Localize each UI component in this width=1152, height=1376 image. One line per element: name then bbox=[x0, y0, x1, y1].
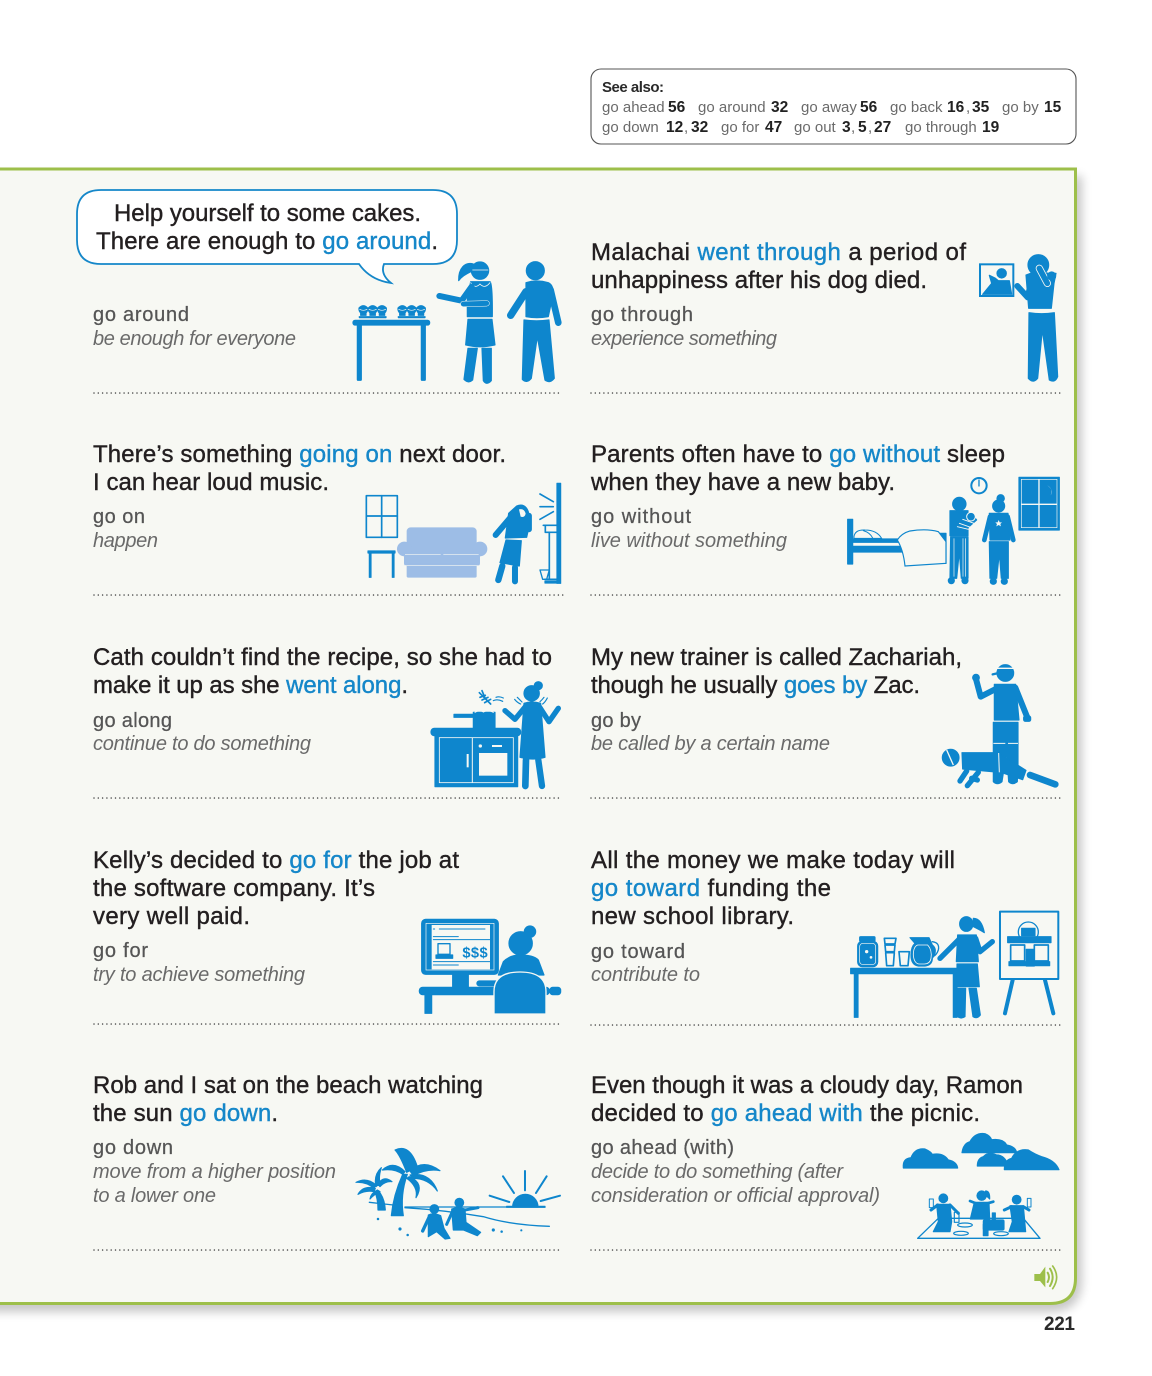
see also box: , bbox=[684, 119, 688, 136]
icon: audio speaker bbox=[1034, 1266, 1057, 1289]
example sentence: the sun go down. bbox=[93, 1100, 278, 1127]
definition bbox=[93, 940, 305, 986]
divider bbox=[591, 392, 1060, 394]
entry: go down bbox=[93, 1072, 560, 1239]
see also box: 32 bbox=[691, 119, 708, 136]
entry: go on bbox=[93, 441, 561, 583]
see also box: 15 bbox=[1044, 99, 1062, 116]
definition: be called by a certain name bbox=[591, 733, 830, 755]
icon: sofa, window and woman listening at wall bbox=[366, 483, 561, 583]
see also box: 12 bbox=[666, 119, 683, 136]
example sentence: very well paid. bbox=[93, 903, 250, 930]
definition: happen bbox=[93, 530, 158, 552]
example sentence: Malachai went through a period of bbox=[591, 239, 966, 266]
see also box: go down bbox=[602, 119, 659, 136]
definition bbox=[93, 304, 296, 350]
see also box: go around bbox=[698, 99, 766, 116]
definition: go without bbox=[591, 506, 691, 528]
definition: go toward bbox=[591, 941, 685, 963]
definition: go on bbox=[93, 506, 145, 528]
definition: go ahead (with) bbox=[591, 1137, 734, 1159]
divider bbox=[591, 797, 1060, 799]
example sentence bbox=[93, 644, 552, 699]
icon: man crying at a framed photo bbox=[980, 255, 1058, 381]
example sentence bbox=[93, 441, 506, 496]
example sentence: My new trainer is called Zachariah, bbox=[591, 644, 962, 671]
see also box: go back bbox=[890, 99, 943, 116]
see also box: go through bbox=[905, 119, 977, 136]
entry: go toward bbox=[591, 847, 1058, 1018]
icon: couple on a beach watching the sunset bbox=[356, 1149, 560, 1239]
example sentence bbox=[591, 644, 962, 699]
main panel bbox=[0, 169, 1076, 1304]
definition: to a lower one bbox=[93, 1185, 216, 1207]
definition: live without something bbox=[591, 530, 787, 552]
icon: woman at a computer with a high-salary job ad bbox=[419, 919, 561, 1014]
divider bbox=[591, 1249, 1060, 1251]
entry: go along bbox=[93, 644, 558, 787]
example sentence: when they have a new baby. bbox=[590, 469, 895, 496]
definition bbox=[591, 710, 830, 755]
definition: consideration or official approval) bbox=[591, 1185, 880, 1207]
see also box bbox=[591, 69, 1076, 144]
see also box: 56 bbox=[860, 99, 878, 116]
example sentence: I can hear loud music. bbox=[93, 469, 329, 496]
see also box: 19 bbox=[982, 119, 1000, 136]
example sentence: There are enough to go around. bbox=[96, 228, 438, 255]
definition: experience something bbox=[591, 328, 777, 350]
see also box: go away bbox=[801, 99, 857, 116]
speech bubble bbox=[77, 190, 457, 283]
definition bbox=[591, 1137, 880, 1207]
definition bbox=[591, 304, 777, 350]
see also box: 5 bbox=[858, 119, 867, 136]
see also box: , bbox=[966, 99, 970, 116]
divider bbox=[94, 797, 562, 799]
see also box: 47 bbox=[765, 119, 782, 136]
example sentence: Help yourself to some cakes. bbox=[114, 200, 421, 227]
definition bbox=[591, 941, 700, 986]
example sentence bbox=[591, 1072, 1023, 1127]
example sentence bbox=[590, 441, 1005, 496]
definition: move from a higher position bbox=[93, 1161, 336, 1183]
divider bbox=[94, 594, 566, 596]
page number: 221 bbox=[1044, 1314, 1075, 1335]
icon: bed, parents with baby, clock and night window bbox=[848, 477, 1059, 584]
example sentence bbox=[93, 1072, 483, 1127]
definition: be enough for everyone bbox=[93, 328, 296, 350]
icon: fundraising table, woman and library poster bbox=[851, 912, 1058, 1018]
see also box: See also: bbox=[602, 79, 664, 96]
see also box: 35 bbox=[972, 99, 990, 116]
definition bbox=[93, 1137, 336, 1207]
panel shadow bbox=[0, 176, 1082, 1312]
icon: picnic under cloudy sky bbox=[903, 1133, 1059, 1238]
icon: woman improvising a recipe at the kitchen counter bbox=[431, 682, 558, 787]
example sentence: Rob and I sat on the beach watching bbox=[93, 1072, 483, 1099]
divider bbox=[94, 392, 562, 394]
entry: go by bbox=[591, 644, 1055, 786]
example sentence: new school library. bbox=[591, 903, 794, 930]
example sentence bbox=[591, 847, 955, 930]
example sentence: Even though it was a cloudy day, Ramon bbox=[591, 1072, 1023, 1099]
example sentence bbox=[96, 200, 438, 255]
example sentence: Kelly’s decided to go for the job at bbox=[93, 847, 459, 874]
example sentence: go toward funding the bbox=[591, 875, 831, 902]
see also box: , bbox=[868, 119, 872, 136]
definition bbox=[591, 506, 787, 552]
definition bbox=[93, 710, 311, 755]
definition: go by bbox=[591, 710, 641, 732]
see also box: go for bbox=[721, 119, 759, 136]
see also box: go by bbox=[1002, 99, 1039, 116]
see also box: go ahead bbox=[602, 99, 665, 116]
example sentence bbox=[591, 239, 966, 294]
see also box: , bbox=[851, 119, 855, 136]
definition: go around bbox=[93, 304, 189, 326]
see also box: 3 bbox=[842, 119, 851, 136]
example sentence: decided to go ahead with the picnic. bbox=[591, 1100, 980, 1127]
entry: go around bbox=[77, 190, 558, 383]
entry: go through bbox=[591, 239, 1058, 381]
definition: go along bbox=[93, 710, 172, 732]
icon: woman at a computer with a high-salary job ad: $$$ bbox=[462, 945, 488, 961]
see also box: 32 bbox=[771, 99, 788, 116]
definition bbox=[93, 506, 158, 552]
definition: go through bbox=[591, 304, 693, 326]
example sentence: make it up as she went along. bbox=[93, 672, 408, 699]
divider bbox=[94, 1023, 562, 1025]
icon: trainer standing over a person doing push-ups bbox=[942, 665, 1055, 786]
divider bbox=[591, 1024, 1060, 1026]
definition: try to achieve something bbox=[93, 964, 305, 986]
see also box: 27 bbox=[874, 119, 891, 136]
example sentence bbox=[93, 847, 459, 930]
entry: go for bbox=[93, 847, 561, 1014]
example sentence: unhappiness after his dog died. bbox=[591, 267, 927, 294]
see also box: 56 bbox=[668, 99, 686, 116]
icon: cakes on a table, woman and man bbox=[353, 262, 558, 383]
divider bbox=[591, 594, 1060, 596]
definition: go down bbox=[93, 1137, 173, 1159]
definition: continue to do something bbox=[93, 733, 311, 755]
entry: go ahead (with) bbox=[591, 1072, 1059, 1238]
example sentence: All the money we make today will bbox=[591, 847, 955, 874]
example sentence: Parents often have to go without sleep bbox=[591, 441, 1005, 468]
example sentence: Cath couldn’t find the recipe, so she had to bbox=[93, 644, 552, 671]
example sentence: though he usually goes by Zac. bbox=[591, 672, 920, 699]
see also box: go out bbox=[794, 119, 837, 136]
example sentence: the software company. It’s bbox=[93, 875, 375, 902]
definition: contribute to bbox=[591, 964, 700, 986]
see also box: 16 bbox=[947, 99, 965, 116]
entry: go without bbox=[590, 441, 1059, 584]
example sentence: There’s something going on next door. bbox=[93, 441, 506, 468]
definition: decide to do something (after bbox=[591, 1161, 844, 1183]
definition: go for bbox=[93, 940, 148, 962]
divider bbox=[94, 1249, 562, 1251]
